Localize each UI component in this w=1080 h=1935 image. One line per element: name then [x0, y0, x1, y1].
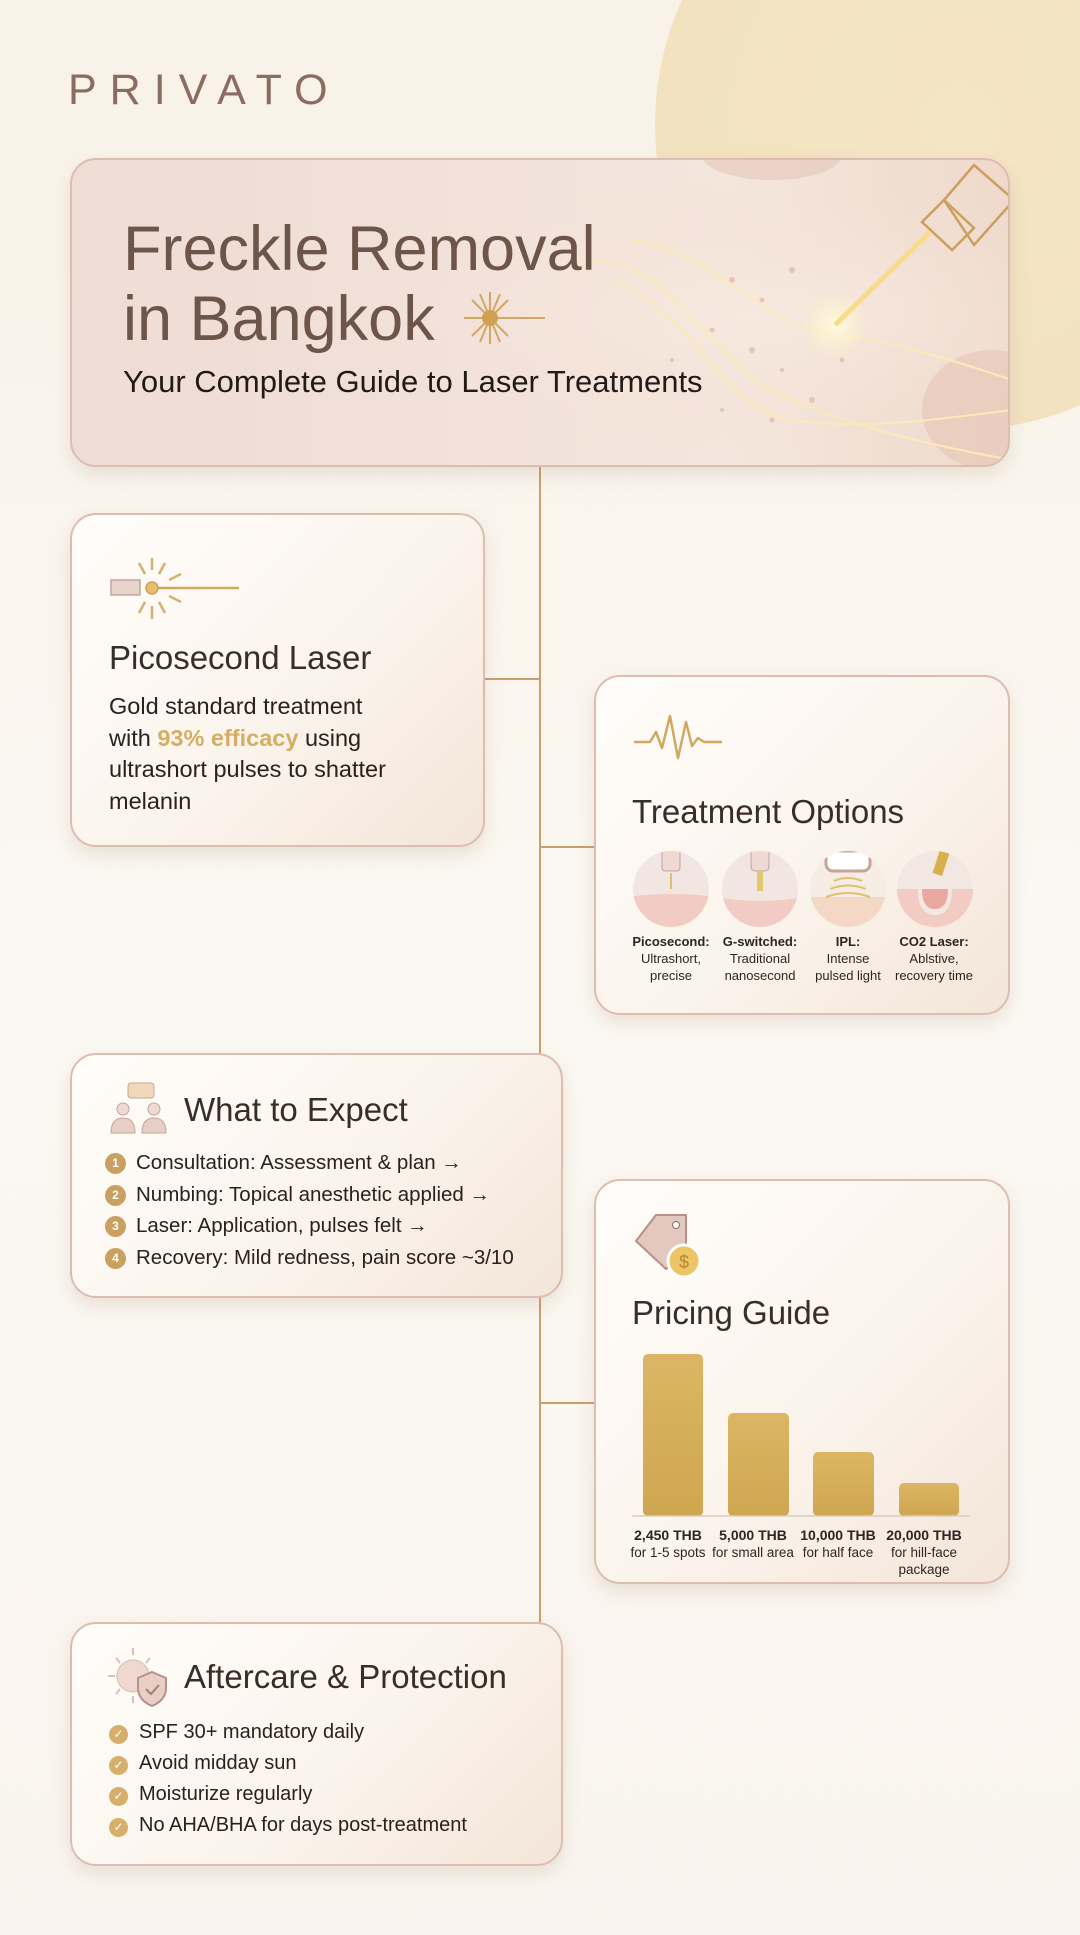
list: aftercare tips: ✓ — [113, 1727, 124, 1741]
panel: Treatment Options — [594, 675, 1010, 1015]
logo: PRIVATO: PRIVATO — [68, 66, 341, 114]
list: steps: Recovery: Mild redness, pain score ~3/10 — [136, 1246, 514, 1269]
subtitle: Your Complete Guide to Laser Treatments — [123, 364, 703, 399]
labels: treatments: Picosecond: — [632, 934, 710, 949]
list: steps: 4 — [112, 1251, 119, 1265]
panel: Treatment Options: pulsed light — [815, 968, 881, 983]
labels: prices: for 1-5 spots — [630, 1545, 706, 1560]
panel: Picosecond Laser — [70, 513, 485, 847]
panel: Pricing Guide: for half face — [803, 1545, 873, 1560]
icon: sparkle — [464, 292, 545, 344]
panel: Pricing Guide: 10,000 THB — [800, 1527, 876, 1543]
timeline line — [539, 466, 541, 1623]
icon: wave — [634, 714, 722, 760]
list: steps: 3 — [112, 1219, 119, 1233]
bar chart — [632, 1354, 970, 1517]
panel: Treatment Options: recovery time — [895, 968, 973, 983]
panel: Pricing Guide — [594, 1179, 1010, 1584]
list: aftercare tips — [109, 1721, 467, 1837]
panel: Pricing Guide: 5,000 THB — [719, 1527, 787, 1543]
hero image: skin and laser — [592, 160, 1008, 465]
panel: Treatment Options: CO2 Laser: — [899, 934, 969, 949]
connectors — [485, 678, 540, 680]
heading: Treatment Options — [632, 793, 904, 830]
hero panel — [70, 158, 1010, 467]
panel: Treatment Options: Intense — [827, 951, 869, 966]
heading: What to Expect — [184, 1091, 408, 1128]
list: aftercare tips: ✓ — [113, 1820, 124, 1834]
list: aftercare tips: SPF 30+ mandatory daily — [139, 1721, 364, 1743]
icon: laser — [110, 558, 239, 619]
list: steps: Consultation: Assessment & plan → — [136, 1151, 462, 1174]
labels: treatments: Ultrashort, precise — [641, 951, 701, 983]
labels: prices — [630, 1527, 706, 1560]
title — [123, 214, 596, 354]
icons: treatment circles — [633, 851, 973, 927]
heading: Aftercare & Protection — [184, 1658, 507, 1695]
list: steps — [105, 1151, 514, 1269]
icon: consultation — [110, 1082, 166, 1134]
title: in Bangkok — [123, 284, 435, 354]
list: aftercare tips: Avoid midday sun — [139, 1752, 296, 1774]
panel: Treatment Options: Ablstive, — [909, 951, 959, 966]
labels: treatments — [632, 934, 710, 983]
panel: Pricing Guide: 20,000 THB — [886, 1527, 962, 1543]
panel: Treatment Options: G-switched: — [723, 934, 797, 949]
heading: Picosecond Laser — [109, 639, 371, 676]
body text: Gold standard treatment with 93% efficacy using ultrashort pulses to shatter melanin — [109, 693, 386, 814]
panel: What to Expect — [70, 1053, 563, 1298]
heading: Pricing Guide — [632, 1294, 830, 1331]
list: steps: 2 — [112, 1188, 119, 1202]
list: aftercare tips: Moisturize regularly — [139, 1783, 312, 1805]
title: Freckle Removal — [123, 214, 596, 284]
list: steps: Laser: Application, pulses felt → — [136, 1214, 428, 1237]
list: aftercare tips: ✓ — [113, 1789, 124, 1803]
list: steps: 1 — [112, 1156, 119, 1170]
panel: Pricing Guide: for small area — [712, 1545, 794, 1560]
list: aftercare tips: ✓ — [113, 1758, 124, 1772]
list: steps: Numbing: Topical anesthetic applied → — [136, 1183, 490, 1206]
icon: sun shield — [108, 1648, 167, 1707]
background arc — [655, 0, 1080, 430]
icon: price tag — [635, 1214, 702, 1278]
labels: prices: 2,450 THB — [634, 1527, 702, 1543]
icon: price tag: $ — [679, 1252, 689, 1272]
panel: Treatment Options: IPL: — [836, 934, 860, 949]
panel: Treatment Options: Traditional nanosecond — [725, 951, 795, 983]
panel: Pricing Guide: for hill-face package — [891, 1545, 957, 1577]
list: aftercare tips: No AHA/BHA for days post-treatment — [139, 1814, 467, 1836]
panel: Aftercare & Protection — [70, 1622, 563, 1866]
